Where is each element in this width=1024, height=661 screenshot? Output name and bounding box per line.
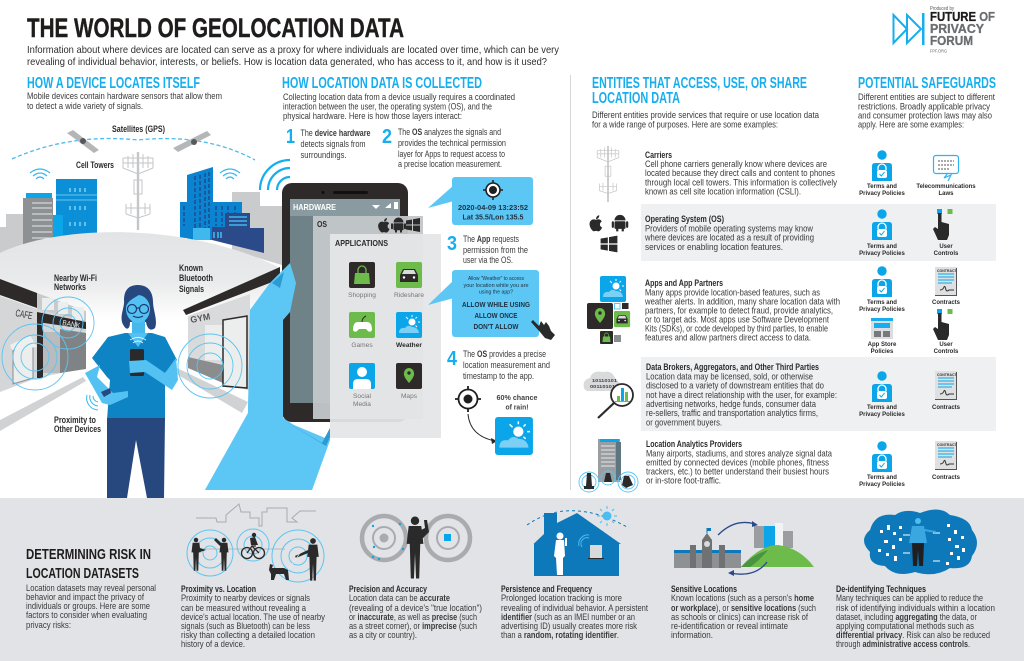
app grid xyxy=(348,262,424,408)
illustration: school, hill and city with arrows xyxy=(674,521,814,576)
safeguards: carriers xyxy=(859,150,976,197)
storefront: gym xyxy=(173,267,280,413)
safeguards: location analytics xyxy=(859,441,961,488)
intro text xyxy=(27,45,560,68)
factor: proximity vs location xyxy=(181,504,326,649)
app grid: Games xyxy=(351,342,373,349)
step 4: timestamp to the app. xyxy=(463,371,534,381)
factor: proximity vs location: risky than collecting a detailed location xyxy=(181,630,315,640)
entity: location analytics providers: trackers, etc.) to better understand their busiest hours xyxy=(646,466,830,476)
description: and consumer protection laws may also xyxy=(858,110,992,120)
app grid: Shopping xyxy=(348,292,376,299)
storefronts: cafe and bank: CAFE xyxy=(14,308,33,322)
entity: apps and app partners: partners, for example to detect fraud, provide analytics, xyxy=(645,306,833,316)
panel: entities that access, use, or share xyxy=(579,75,996,492)
illustration: data cloud and person xyxy=(864,509,977,574)
phone: OS layer: OS xyxy=(317,220,328,229)
icon: building with people in rings xyxy=(579,439,638,492)
factor: precision and accuracy: or inaccurate, as well as precise (such xyxy=(349,612,477,622)
entity: carriers: known as cell site location information (CSLI). xyxy=(645,186,801,196)
icon: terms and privacy policies: Privacy Policies xyxy=(859,412,906,418)
icon: location target to weather app: 60% chance xyxy=(496,395,538,402)
description: Different entities provide services that require or use location data xyxy=(592,110,819,120)
logo: Future of Privacy Forum: FUTURE OF xyxy=(930,10,995,24)
entity: location analytics providers: or in-store foot-traffic. xyxy=(646,476,721,486)
scene labels: Other Devices xyxy=(54,424,101,434)
entity: operating system: services or enabling location features. xyxy=(645,242,783,252)
hand thumb over phone xyxy=(205,263,330,490)
entity: operating system: Providers of mobile operating systems may know xyxy=(645,224,814,234)
heading xyxy=(26,546,151,582)
icon: telecommunications laws: Laws xyxy=(938,191,954,197)
icon: terms and privacy policies xyxy=(859,441,906,488)
description xyxy=(858,92,995,130)
entity: carriers xyxy=(597,146,838,202)
icon: app store policies: Policies xyxy=(871,349,894,355)
step 2: provides the technical permission xyxy=(398,138,506,148)
step 2: The OS analyzes the signals and xyxy=(398,127,501,137)
scene labels: Signals xyxy=(179,284,204,294)
factor: precision and accuracy: as a city or country). xyxy=(349,630,417,640)
phone: applications layer xyxy=(330,234,441,438)
logo: Future of Privacy Forum xyxy=(894,6,995,54)
icon: app store policies: App Store xyxy=(868,342,897,348)
icon: contracts: Contracts xyxy=(932,405,961,411)
icon: contracts xyxy=(932,441,961,481)
icon: terms and privacy policies: Terms and xyxy=(867,475,897,481)
entity: data brokers: re-sellers, traffic and transportation analytics firms, xyxy=(646,408,818,418)
step 4 xyxy=(447,348,550,381)
icon: terms and privacy policies xyxy=(859,266,906,313)
icon: user controls xyxy=(933,309,959,355)
description xyxy=(592,110,819,130)
safeguards: data brokers xyxy=(859,371,961,418)
factor: de-identifying techniques: differential privacy. Risk can also be reduced xyxy=(836,630,990,640)
icon: user controls: Controls xyxy=(934,251,959,257)
step 1: surroundings. xyxy=(300,150,346,160)
entity: location analytics providers xyxy=(579,439,832,492)
logo: Future of Privacy Forum: Produced by xyxy=(930,6,954,12)
step 3: 3 xyxy=(447,233,457,255)
entity: operating system xyxy=(590,214,814,252)
step 1: detects signals from xyxy=(300,139,366,149)
band background xyxy=(0,498,1024,661)
entity: data brokers: advertising networks, hedge funds, consumer data xyxy=(646,399,816,409)
callout: permission prompt: Allow "Weather" to access xyxy=(468,276,524,282)
factor: sensitive locations: Known locations (such as a person's home xyxy=(671,593,814,603)
entity: apps and app partners: Kits (SDKs), or code developed by third parties, to enable xyxy=(645,324,828,334)
app grid: Maps xyxy=(401,393,418,400)
icon: terms and privacy policies: Privacy Policies xyxy=(859,191,906,197)
description: privacy risks: xyxy=(26,620,71,630)
entity: carriers: Carriers xyxy=(645,150,672,161)
factor: precision and accuracy xyxy=(349,516,482,640)
description: interaction between the user, the operating system (OS), and the xyxy=(283,102,492,112)
icon: contracts xyxy=(932,267,961,306)
description: Location datasets may reveal personal xyxy=(26,583,156,593)
scene labels: Proximity to xyxy=(54,415,97,425)
step 3: permission from the xyxy=(463,245,528,255)
icon: contracts: Contracts xyxy=(932,475,961,481)
factor: precision and accuracy: as a street corner), or imprecise (such xyxy=(349,621,477,631)
icon: OS logos xyxy=(590,215,628,252)
icon: contracts: CONTRACT xyxy=(937,443,957,447)
factor: de-identifying techniques: applying computational methods such as xyxy=(836,621,975,631)
hand shadow xyxy=(272,272,330,446)
icon: app tiles xyxy=(587,276,630,344)
description xyxy=(283,92,515,121)
scene labels: Cell Towers xyxy=(76,160,114,170)
factor: sensitive locations xyxy=(671,521,816,640)
factor: sensitive locations: Sensitive Locations xyxy=(671,584,737,595)
factor: persistence and frequency: Prolonged location tracking is more xyxy=(501,593,622,603)
app grid: Weather xyxy=(396,342,422,349)
panel: determining risk xyxy=(0,498,1024,661)
illustration: two targets and person xyxy=(362,516,470,578)
app grid: Rideshare xyxy=(394,292,424,299)
factor: sensitive locations: or workplace), or sensitive locations (such xyxy=(671,603,816,613)
icon: terms and privacy policies: Privacy Policies xyxy=(859,251,906,257)
phone: OS layer xyxy=(313,216,423,419)
intro text: revealing of individual behavior, interests, or beliefs. How is location data generated, who has access to it, and how is it used? xyxy=(27,57,547,68)
icon: cell tower xyxy=(123,152,153,230)
factor: proximity vs location: can be measured without revealing a xyxy=(181,603,306,613)
heading: HOW LOCATION DATA IS COLLECTED xyxy=(282,75,482,92)
description: to detect a wide variety of signals. xyxy=(27,101,143,111)
entity: operating system: Operating System (OS) xyxy=(645,214,724,225)
entity: carriers: Cell phone carriers generally know where devices are xyxy=(645,159,827,169)
description: Different entities are subject to different xyxy=(858,92,995,102)
factor: precision and accuracy: (revealing of a device's "true location") xyxy=(349,603,482,613)
icon: cloud and magnifier: 00110101 xyxy=(590,384,616,389)
icon: terms and privacy policies xyxy=(859,209,906,257)
icon: terms and privacy policies: Terms and xyxy=(867,244,897,250)
icon: tapping hand xyxy=(531,320,555,340)
description: factors to consider when evaluating xyxy=(26,610,147,620)
step 2: 2 xyxy=(382,126,392,148)
entity: location analytics providers: emitted by connected devices (mobile phones, fitness xyxy=(646,458,830,468)
step 3: The App requests xyxy=(463,234,519,244)
icon: telecommunications laws: Telecommunications xyxy=(916,184,976,190)
storefronts: cafe and bank xyxy=(0,279,86,431)
factor: de-identifying techniques: through administrative access controls. xyxy=(836,639,970,649)
icon: terms and privacy policies: Privacy Policies xyxy=(859,482,906,488)
step 2: a precise location measurement. xyxy=(398,159,502,169)
signal rings xyxy=(2,297,242,398)
factor: proximity vs location: Proximity vs. Location xyxy=(181,584,256,595)
app grid: Social xyxy=(353,393,372,400)
panel: how a device locates itself xyxy=(0,75,290,498)
factor: sensitive locations: as schools or clinics) can increase risk of xyxy=(671,612,808,622)
entity: apps and app partners: Apps and App Partners xyxy=(645,278,723,289)
step 2: layer for Apps to request access to xyxy=(398,149,505,159)
OS icons xyxy=(378,218,420,233)
factor: persistence and frequency xyxy=(501,506,648,640)
scene labels xyxy=(54,124,213,434)
icon: terms and privacy policies xyxy=(859,371,906,418)
intro text: Information about where devices are located can serve as a proxy for where individuals are located over time, which can be very xyxy=(27,45,560,56)
phone: applications layer: APPLICATIONS xyxy=(335,238,388,248)
panel: how location data is collected xyxy=(205,75,555,490)
callout: permission prompt: DON'T ALLOW xyxy=(474,322,519,331)
row backgrounds xyxy=(641,204,996,431)
icon: telecommunications laws xyxy=(916,156,976,197)
entity: data brokers xyxy=(584,362,837,428)
logo: Future of Privacy Forum: FPF.ORG xyxy=(930,48,947,54)
step 2 xyxy=(382,126,506,169)
entity: apps and app partners: Many apps provide location-based features, such as xyxy=(645,288,821,298)
description: restrictions. Broadly applicable privacy xyxy=(858,102,991,112)
callout: permission prompt: your location while you are xyxy=(464,283,529,289)
icon: user controls: Controls xyxy=(934,349,959,355)
heading: LOCATION DATA xyxy=(592,90,680,107)
illustration: people in signal rings xyxy=(187,504,324,582)
scene labels: Known xyxy=(179,263,203,273)
heading: LOCATION DATASETS xyxy=(26,565,139,582)
entity: data brokers: not have a direct relationship with the user, for example: xyxy=(646,390,837,400)
factor: sensitive locations: information. xyxy=(671,630,713,640)
description xyxy=(27,91,222,111)
illustration: house with person and speaker xyxy=(527,506,629,576)
icon: contracts xyxy=(932,371,961,411)
satellites with dashed orbit xyxy=(12,130,255,160)
description: behavior and impact the privacy of xyxy=(26,592,144,602)
title: THE WORLD OF GEOLOCATION DATA xyxy=(27,13,404,43)
icon: terms and privacy policies: Terms and xyxy=(867,405,897,411)
city skyline illustration xyxy=(0,167,282,265)
callout: timestamp: Lat 35.5/Lon 135.5 xyxy=(462,214,524,222)
entity: carriers: through local cell towers. This information is collectively xyxy=(645,178,838,188)
scene labels: Satellites (GPS) xyxy=(112,124,165,134)
icon: contracts: Contracts xyxy=(932,300,961,306)
description: physical hardware. Here is how those layers interact: xyxy=(283,111,462,121)
icon: cloud and magnifier xyxy=(584,372,633,418)
callout: permission prompt: ALLOW ONCE xyxy=(474,311,518,320)
callout: permission prompt: ALLOW WHILE USING xyxy=(462,300,530,309)
step 3: user via the OS. xyxy=(463,255,513,265)
icon: terms and privacy policies: Terms and xyxy=(867,300,897,306)
entity: location analytics providers: Location Analytics Providers xyxy=(646,439,742,450)
callout: permission prompt: using the app? xyxy=(479,290,513,296)
factor: persistence and frequency: advertising ID) usually creates more risk xyxy=(501,621,638,631)
description xyxy=(26,583,156,630)
scene labels: Networks xyxy=(54,282,86,292)
safeguards: apps xyxy=(859,266,961,355)
factor: proximity vs location: device's actual location. The use of nearby xyxy=(181,612,326,622)
entity: data brokers: disclosed to a variety of downstream entities that do xyxy=(646,380,824,390)
factor: proximity vs location: history of a device. xyxy=(181,639,245,649)
factor: persistence and frequency: revealing of individual behavior. A persistent xyxy=(501,603,648,613)
factor: proximity vs location: Proximity to nearby devices or signals xyxy=(181,593,311,603)
icon: cell tower xyxy=(597,146,619,202)
icon: terms and privacy policies xyxy=(859,150,906,197)
safeguards: operating system xyxy=(859,209,959,257)
factor: proximity vs location: signals (such as Bluetooth) can be less xyxy=(181,621,311,631)
step 4: 4 xyxy=(447,348,458,370)
entity: data brokers: or government buyers. xyxy=(646,418,722,428)
storefront: gym: GYM xyxy=(189,311,211,325)
factor: precision and accuracy: Precision and Accuracy xyxy=(349,584,428,595)
scene labels: Bluetooth xyxy=(179,273,213,283)
step 4: location measurement and xyxy=(463,360,550,370)
factor: de-identifying techniques: Many techniques can be applied to reduce the xyxy=(836,593,983,603)
icon: app store policies xyxy=(868,318,897,355)
icon: user controls: User xyxy=(939,342,953,348)
icon: terms and privacy policies: Privacy Policies xyxy=(859,307,906,313)
entity: apps and app partners xyxy=(587,276,840,344)
factor: de-identifying techniques: risk of identifying individuals within a location xyxy=(836,603,995,613)
icon: user controls xyxy=(933,209,959,257)
entity: data brokers: Location data may be licensed, sold, or otherwise xyxy=(646,372,813,382)
entity: carriers: located because they direct calls and content to phones xyxy=(645,168,836,178)
icon: contracts: CONTRACT xyxy=(937,373,957,377)
factor: de-identifying techniques: De-identifying Techniques xyxy=(836,584,926,595)
description: for a wide range of purposes. Here are some examples: xyxy=(592,120,778,130)
icon: double chevron xyxy=(894,15,921,43)
heading xyxy=(592,75,807,107)
description: apply. Here are some examples: xyxy=(858,120,964,130)
icon: wifi signals xyxy=(30,160,290,190)
factor: persistence and frequency: Persistence and Frequency xyxy=(501,584,593,595)
storefronts: cafe and bank: BANK xyxy=(62,318,81,330)
entity: apps and app partners: weather alerts. In addition, many share location data with xyxy=(644,296,840,306)
phone: hardware layer: HARDWARE xyxy=(293,202,336,212)
logo: Future of Privacy Forum: FORUM xyxy=(930,34,973,48)
step 1 xyxy=(286,126,371,160)
icon: terms and privacy policies: Terms and xyxy=(867,184,897,190)
logo: Future of Privacy Forum: PRIVACY xyxy=(930,22,985,36)
scene labels: Nearby Wi-Fi xyxy=(54,273,97,283)
icon: user controls: User xyxy=(939,244,953,250)
description: individuals or groups. Here are some xyxy=(26,601,150,611)
person holding phone xyxy=(85,285,178,498)
ground dome xyxy=(0,232,280,320)
factor: sensitive locations: re-identification or reveal intimate xyxy=(671,621,788,631)
phone: hardware layer xyxy=(282,183,408,422)
factor: persistence and frequency: than a random, rotating identifier. xyxy=(501,630,619,640)
step 4: The OS provides a precise xyxy=(463,349,546,359)
panel: potential safeguards xyxy=(858,75,996,488)
factor: de-identifying techniques xyxy=(836,509,995,649)
entity: apps and app partners: or to target ads. Most apps use Software Development xyxy=(645,314,829,324)
icon: contracts: CONTRACT xyxy=(937,269,957,273)
factor: persistence and frequency: identifier (such as an IMEI number or an xyxy=(501,612,635,622)
heading: HOW A DEVICE LOCATES ITSELF xyxy=(27,75,200,92)
entity: operating system: where devices are located as a result of providing xyxy=(644,232,814,242)
icon: location target to weather app: of rain! xyxy=(506,404,528,412)
step 3 xyxy=(447,233,528,265)
divider xyxy=(570,75,571,490)
callout: permission prompt xyxy=(428,270,555,340)
callout: timestamp: 2020-04-09 13:23:52 xyxy=(458,205,528,212)
description: Collecting location data from a device usually requires a coordinated xyxy=(283,92,515,102)
factor: de-identifying techniques: dataset, including aggregating the data, or xyxy=(836,612,977,622)
arm and hand behind phone xyxy=(205,263,330,490)
callout: timestamp xyxy=(428,177,533,225)
icon: cloud and magnifier: 10110101 xyxy=(592,378,618,383)
entity: apps and app partners: features and allow partners direct access to data. xyxy=(645,332,811,342)
entity: data brokers: Data Brokers, Aggregators, and Other Third Parties xyxy=(646,362,819,373)
step 1: The device hardware xyxy=(300,128,371,138)
icon: location target to weather app xyxy=(455,386,538,455)
heading: ENTITIES THAT ACCESS, USE, OR SHARE xyxy=(592,75,807,92)
factor: precision and accuracy: Location data can be accurate xyxy=(349,593,450,603)
entity: location analytics providers: Many airports, stadiums, and stores analyze signal data xyxy=(646,448,832,458)
step 1: 1 xyxy=(286,126,295,148)
description: Mobile devices contain hardware sensors that allow them xyxy=(27,91,222,101)
app grid: Media xyxy=(353,401,371,408)
heading: DETERMINING RISK IN xyxy=(26,546,151,563)
